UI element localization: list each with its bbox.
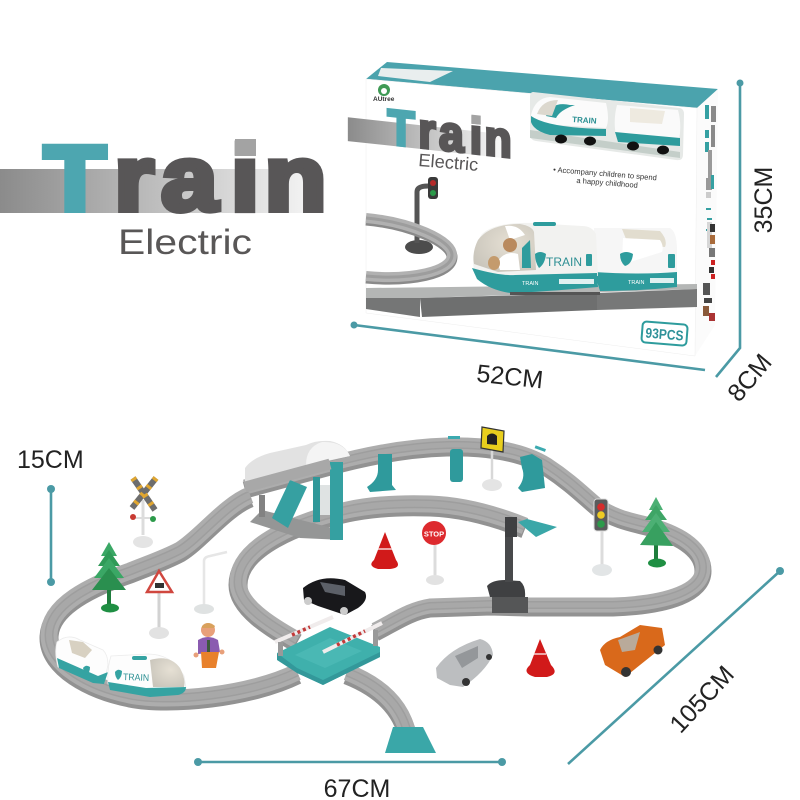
box title [348,95,512,169]
car silver [436,639,493,687]
tree left [92,542,126,612]
sign: warning triangle [147,571,172,639]
cone right [526,639,555,677]
station with stairs [250,477,343,540]
traffic light [592,499,612,576]
toy train front car: TRAIN [123,672,149,684]
car orange [600,625,665,677]
upper deck over station [245,464,330,487]
box tagline: • Accompany children to spend [553,165,657,182]
crossing barrier right [323,623,382,652]
dimension: 67CM [194,758,506,800]
dark signal [487,517,528,613]
box logo [373,84,395,103]
title subtitle: Electric: Electric [118,223,252,262]
cone left [371,532,398,569]
box window with small train: TRAIN [572,115,597,126]
sign: stop [422,521,446,585]
box window with small train [530,92,684,160]
crossing barrier left [275,617,333,656]
toy train rear car [56,637,108,684]
box front face [366,79,697,356]
dimension: 52CM: 52CM [475,360,544,394]
box: large train second car: TRAIN [628,280,645,286]
dimension: 105CM: 105CM [664,661,740,739]
dimension: 8CM: 8CM [722,349,778,407]
box side face [695,89,718,356]
crossing plate [277,627,380,685]
box badge: 93PCS: 93PCS [645,325,684,344]
box tagline [552,165,657,191]
dimension: 52CM [350,322,705,394]
toy train front car [108,654,186,697]
pillar [330,462,343,540]
track end ramp: top [518,519,557,537]
bridge piers [367,436,546,492]
sign: stop: STOP [424,530,444,538]
box title: rain [418,103,512,169]
dimension: 35CM [716,80,778,377]
playset: tracks [49,445,703,738]
dimension: 15CM [17,446,84,586]
dimension: 35CM: 35CM [750,167,778,233]
box tagline: a happy childhood [576,176,638,190]
box lid [366,62,718,108]
street lamp [194,552,227,614]
figure [194,623,224,668]
box subtitle: Electric [418,150,479,175]
sign: railway crossing [130,478,156,548]
tunnel roof [245,441,350,482]
box curved track [366,218,452,279]
box: large train front car [472,222,600,295]
box logo: AUtree [373,96,395,103]
car black [303,578,366,615]
track end ramp: bottom [385,727,436,753]
box title: T [387,100,415,158]
title word: Train: rain [114,127,326,230]
dimension: 15CM: 15CM [17,446,84,474]
box traffic light [405,177,438,254]
title: Train Electric [0,127,326,262]
box: large train front car: TRAIN [546,255,582,269]
box: large train front car: TRAIN [522,281,539,287]
box: large train second car [594,228,677,291]
title word: Train: T [44,127,106,230]
box straight track [366,284,697,317]
tree right [640,497,673,568]
panel: product box [348,62,718,356]
sign: tunnel [481,427,504,491]
box lid thumbnail [378,68,453,82]
dimension: 105CM [568,567,784,764]
